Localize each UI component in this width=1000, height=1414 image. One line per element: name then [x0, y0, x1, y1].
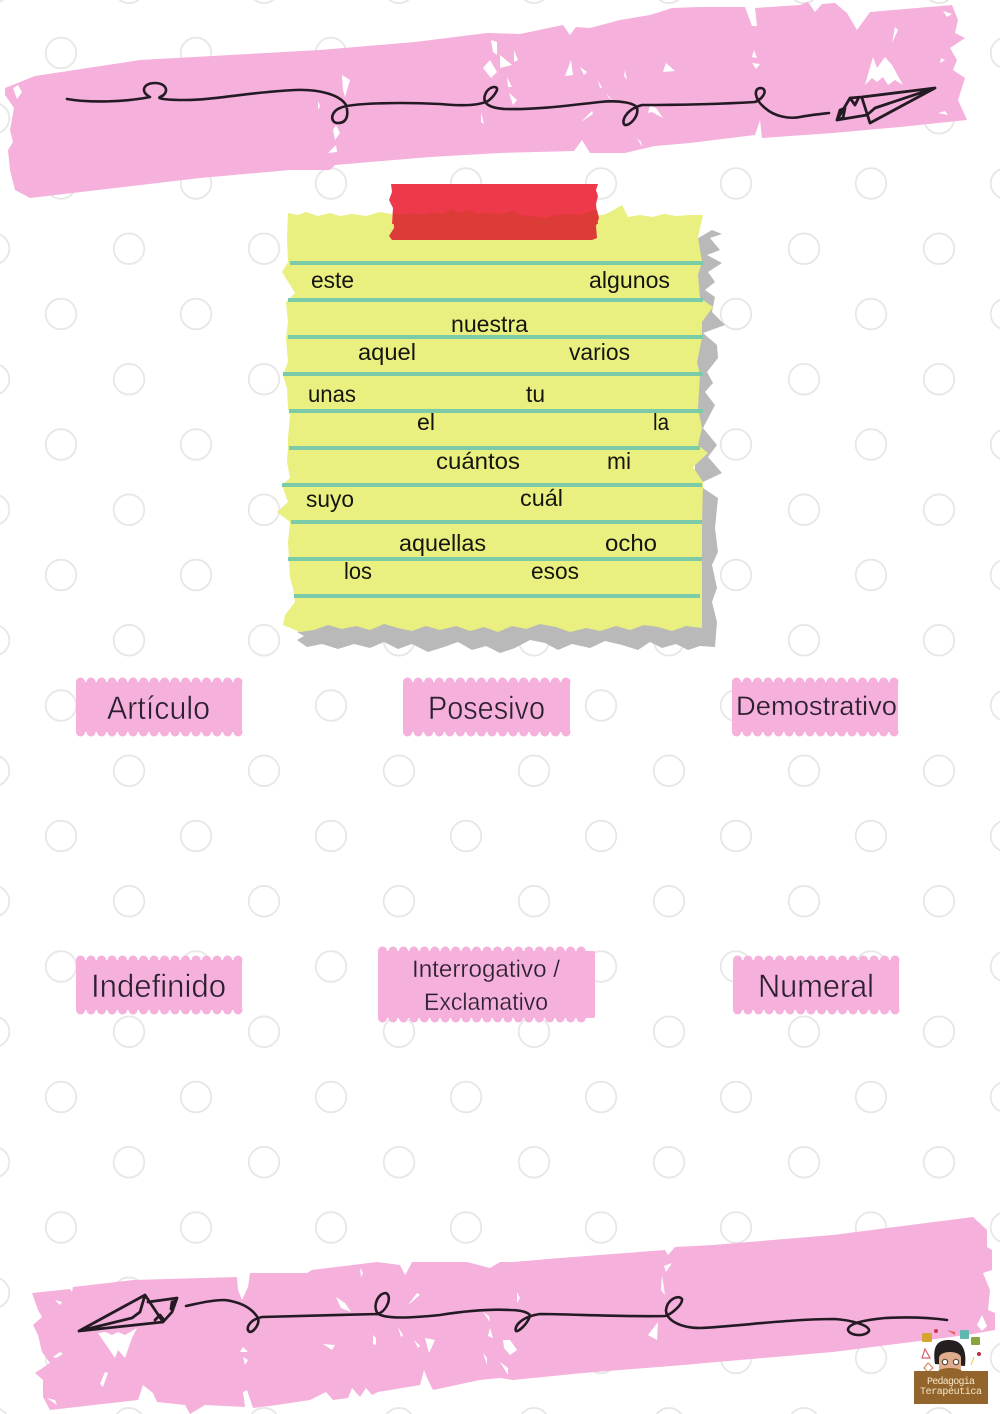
bottom pink brush banner	[32, 1217, 995, 1414]
label: Interrogativo / Exclamativo: Interrogativo /	[412, 956, 560, 983]
word list: los	[344, 558, 372, 584]
bottom squiggle line with paper plane	[79, 1293, 947, 1335]
word list: aquellas	[399, 530, 486, 556]
brown board with name: Pedagogia	[927, 1376, 975, 1388]
word list: mi	[607, 448, 631, 474]
yellow note paper	[277, 205, 713, 632]
word list: suyo	[306, 486, 354, 512]
label: Numeral: Numeral	[758, 968, 874, 1004]
word list: esos	[531, 558, 579, 584]
word list: el	[417, 409, 435, 435]
top pink brush banner	[5, 2, 967, 198]
label: Demostrativo	[732, 682, 898, 732]
logo: Pedagogía Terapéutica	[914, 1329, 988, 1404]
brown board with name	[914, 1368, 988, 1404]
word list	[306, 267, 670, 584]
word list: algunos	[589, 267, 670, 293]
label: Interrogativo / Exclamativo	[378, 951, 595, 1018]
sticky note with word list	[277, 184, 725, 653]
note shadow	[297, 230, 725, 653]
label: Artículo	[76, 682, 242, 732]
word list: varios	[569, 339, 630, 365]
word list: este	[311, 267, 354, 293]
word list: ocho	[605, 530, 657, 556]
word list: cuántos	[436, 448, 520, 474]
red tape	[389, 184, 599, 240]
icon: cartoon face	[934, 1340, 965, 1372]
label: Indefinido: Indefinido	[91, 968, 226, 1004]
word list: tu	[526, 381, 545, 407]
label: Interrogativo / Exclamativo: Exclamativo	[424, 989, 548, 1016]
label: Posesivo	[403, 682, 570, 732]
label: Numeral	[733, 960, 899, 1010]
word list: nuestra	[451, 311, 529, 337]
word list: unas	[308, 381, 356, 407]
label: Demostrativo: Demostrativo	[736, 691, 897, 721]
ruled lines	[282, 263, 703, 596]
word list: aquel	[358, 339, 416, 365]
word list: cuál	[520, 485, 563, 511]
label: Indefinido	[76, 960, 242, 1010]
top squiggle line with paper plane	[67, 83, 935, 125]
label: Artículo: Artículo	[107, 690, 210, 726]
word list: la	[653, 409, 670, 435]
icon: scattered school items	[922, 1329, 981, 1372]
brown board with name: Terapéutica	[920, 1386, 982, 1398]
label: Posesivo: Posesivo	[428, 690, 545, 726]
